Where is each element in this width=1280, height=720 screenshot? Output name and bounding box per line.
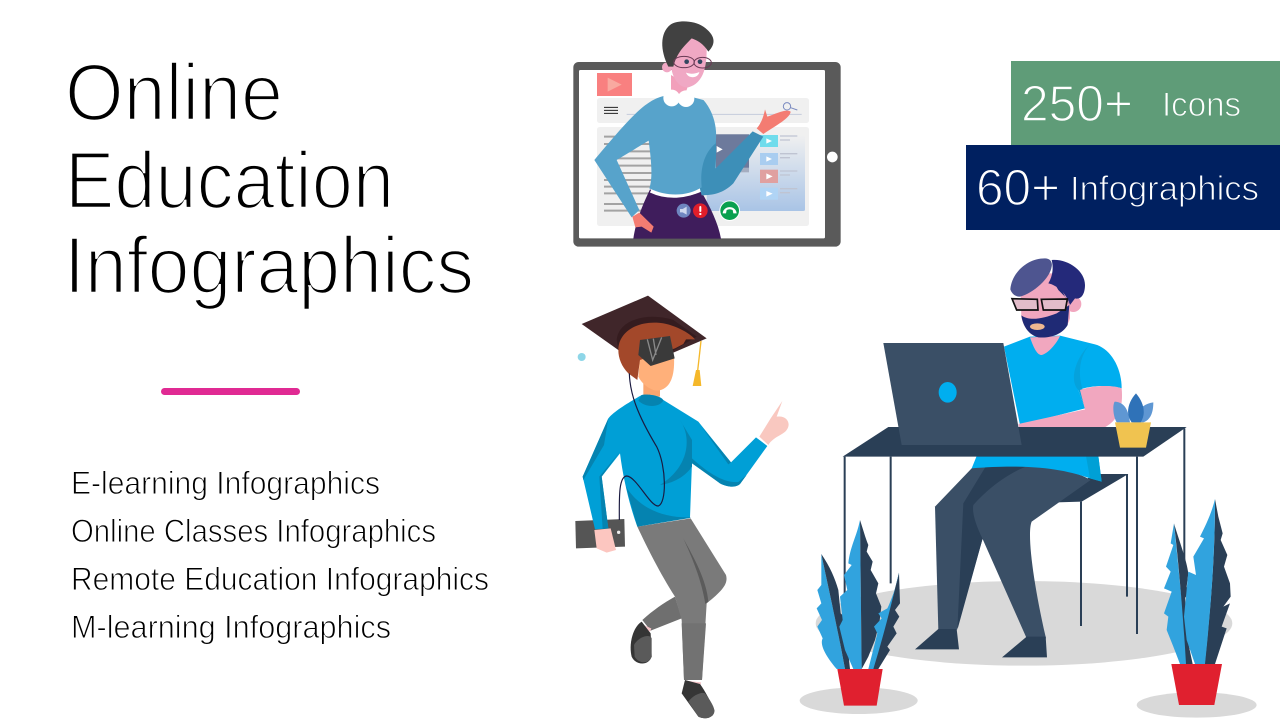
- topic list: Remote Education Infographics: [71, 561, 489, 597]
- neck and head: [618, 323, 695, 397]
- title: Education: [65, 136, 394, 226]
- graduation cap: [582, 296, 707, 386]
- teacher figure: [594, 21, 791, 239]
- topic list: E-learning Infographics: [71, 465, 380, 501]
- left floor plant: [817, 520, 900, 706]
- topic list: [71, 465, 489, 645]
- topic list: Online Classes Infographics: [71, 513, 436, 549]
- tablet frame: [573, 62, 841, 247]
- sweater: [583, 395, 767, 529]
- chair: [1057, 474, 1128, 626]
- badge: 60+ infographics: Infographics: [1070, 170, 1259, 208]
- illustration: student with VR headset: [575, 296, 789, 718]
- badge: 60+ infographics: 60+: [976, 159, 1060, 216]
- badge: 250+ icons: [1011, 61, 1280, 145]
- hands: [594, 401, 789, 553]
- desk plant: [1113, 393, 1153, 448]
- badge: 250+ icons: 250+: [1021, 75, 1133, 132]
- accent divider: [161, 388, 300, 395]
- search bar: [597, 98, 809, 123]
- badge: 250+ icons: Icons: [1162, 86, 1241, 124]
- desk top: [843, 427, 1187, 457]
- title: Infographics: [64, 221, 474, 311]
- title: Online: [65, 48, 283, 138]
- man figure: [915, 258, 1122, 657]
- illustration: man working at laptop: [800, 258, 1257, 718]
- laptop: [883, 343, 1022, 445]
- title: [64, 48, 474, 311]
- trousers: [637, 518, 727, 680]
- shoes: [631, 622, 714, 718]
- decorative dot: [578, 353, 586, 361]
- right floor plant: [1164, 499, 1231, 705]
- floor shadows: [800, 581, 1257, 718]
- topic list: M-learning Infographics: [71, 609, 391, 645]
- badge: 60+ infographics: [966, 145, 1280, 230]
- course content panel: [597, 127, 809, 226]
- desk legs: [845, 428, 1184, 634]
- illustration: tablet with teacher: [573, 21, 841, 247]
- call buttons: [677, 200, 740, 221]
- tablet in hand: [575, 519, 625, 548]
- headset cable: [619, 373, 664, 520]
- video logo: [597, 73, 632, 96]
